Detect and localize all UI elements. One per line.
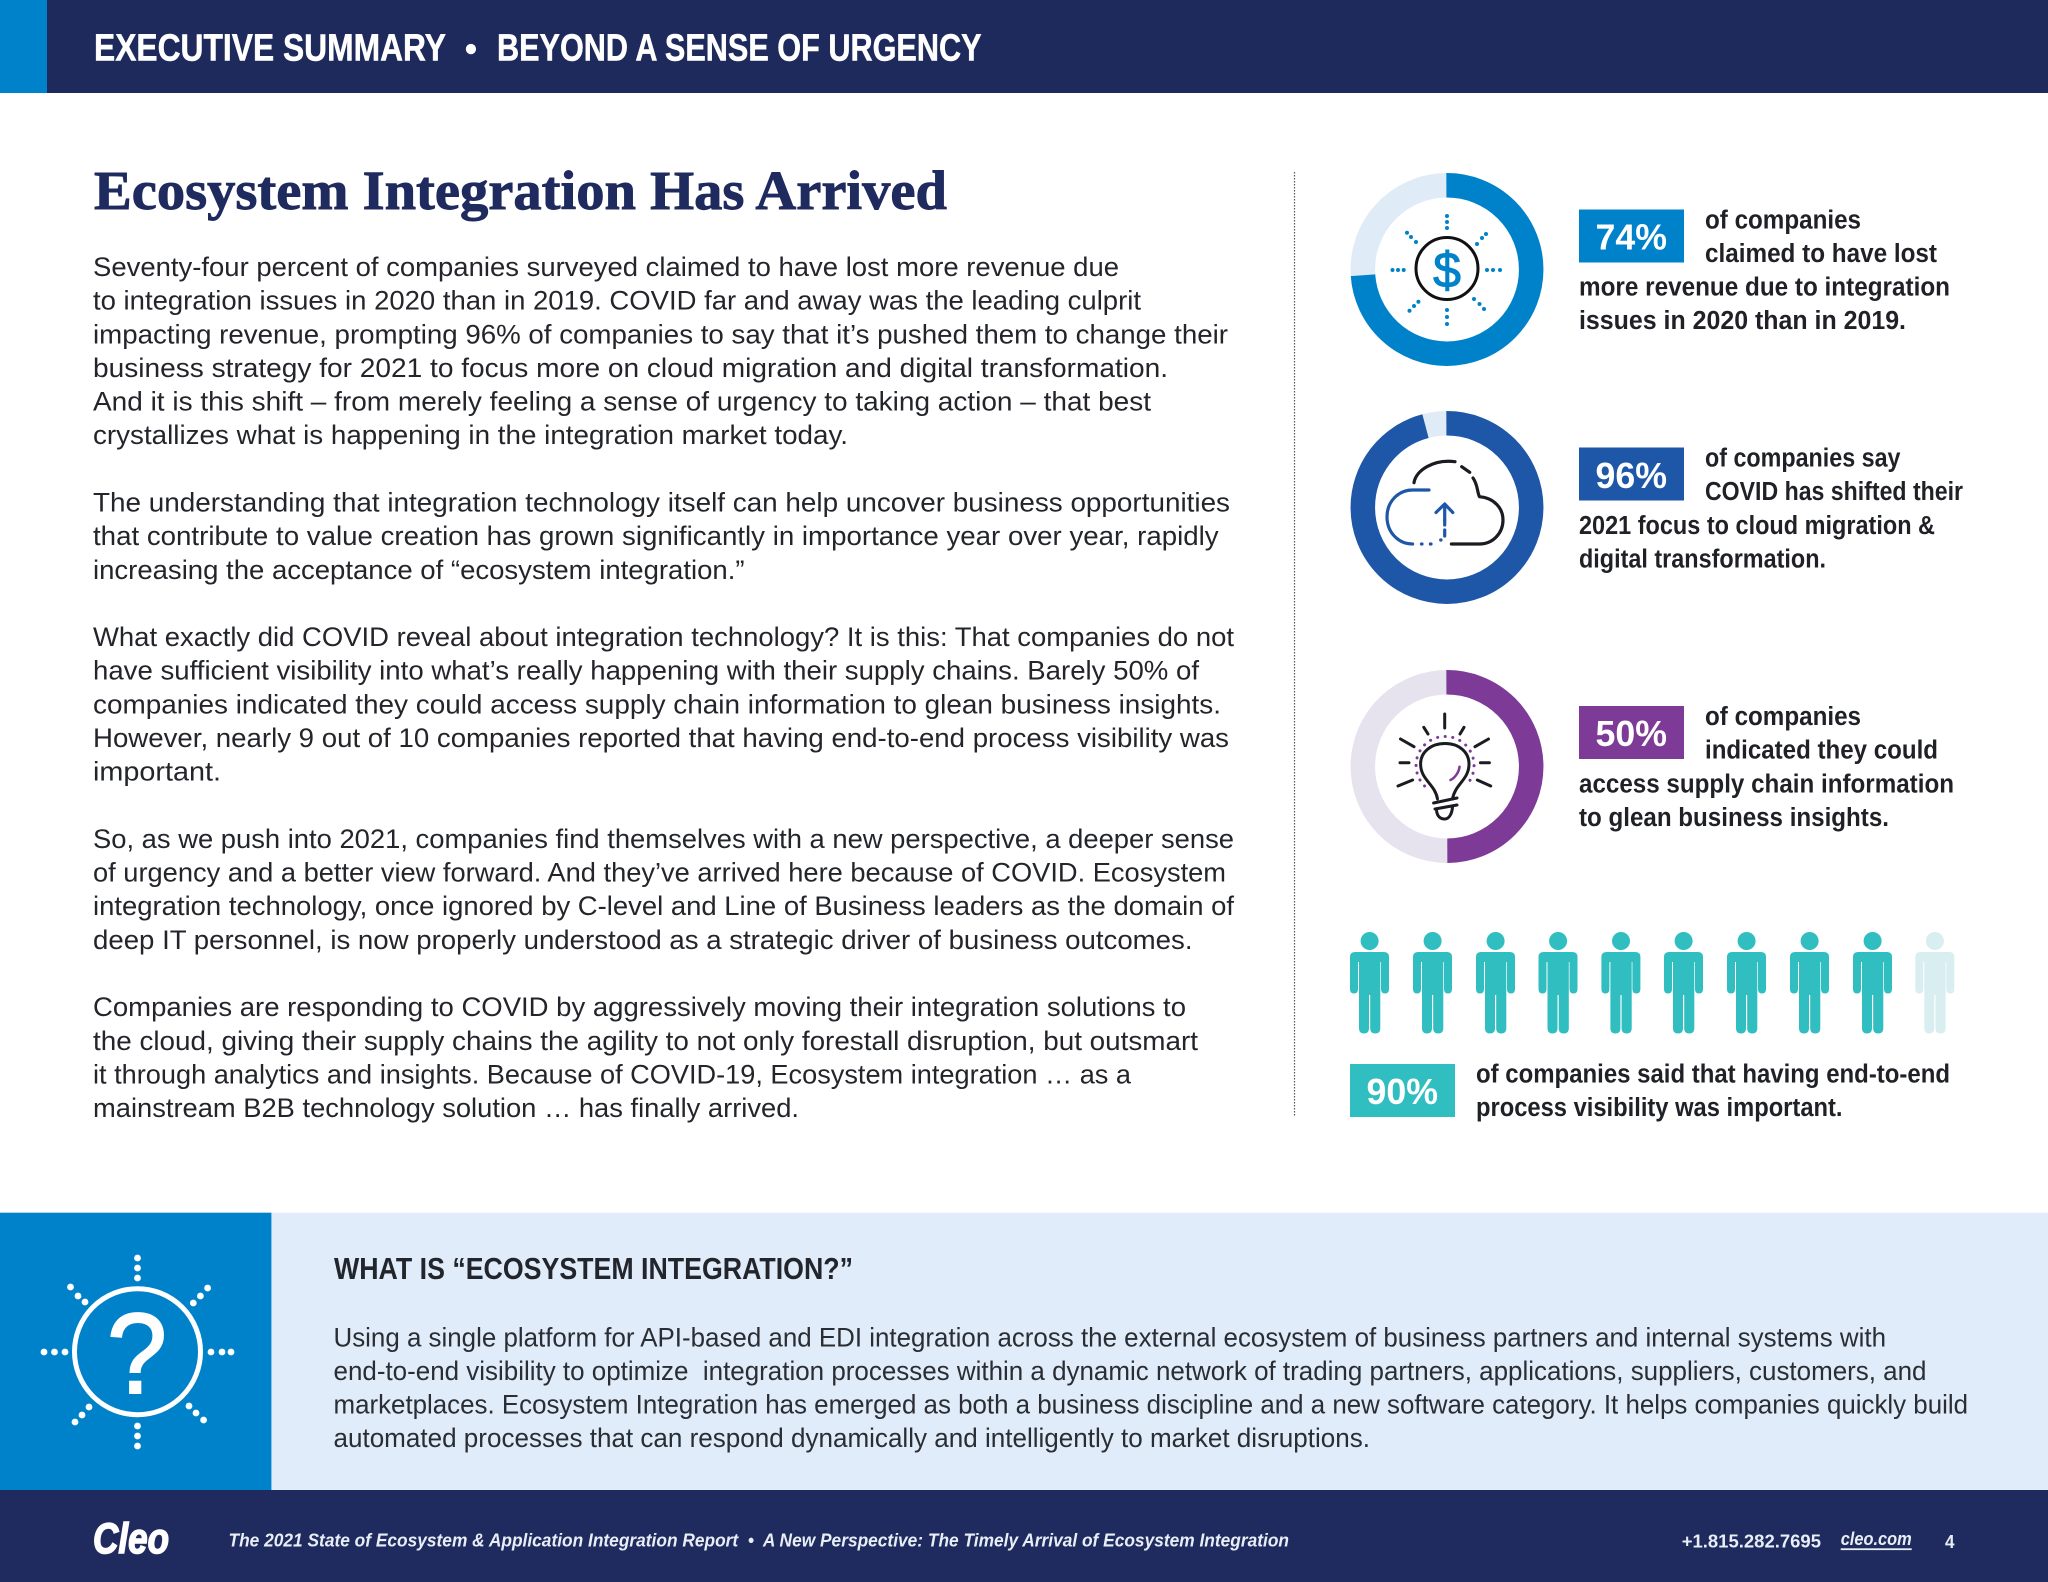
stat text 74%: [1579, 206, 1950, 335]
badge 90%: [1350, 1064, 1455, 1117]
pictogram: nine of ten people: [1350, 932, 1954, 1034]
paragraph 5: mainstream B2B technology solution … has finally arrived.: [93, 1093, 799, 1123]
icon: dollar sign with rays: [1390, 214, 1502, 326]
paragraph 3: important.: [93, 757, 221, 787]
stat: 50% supply chain insight: [1363, 682, 1954, 851]
paragraph 3: However, nearly 9 out of 10 companies reported that having end-to-end process visibility was: [93, 723, 1229, 753]
paragraph 5: [93, 992, 1199, 1123]
donut chart 96%: [1363, 423, 1531, 592]
panel definition text: marketplaces. Ecosystem Integration has emerged as both a business discipline and a new software category. It helps companies quickly build: [334, 1390, 1968, 1420]
stat text 50%: [1579, 703, 1954, 832]
icon: question mark with rays: [41, 1255, 234, 1449]
paragraph 1: business strategy for 2021 to focus more on cloud migration and digital transformation.: [93, 353, 1168, 383]
panel definition text: [334, 1323, 1968, 1453]
stat: 96% cloud shift: [1363, 423, 1963, 592]
paragraph 5: the cloud, giving their supply chains the agility to not only forestall disruption, but outsmart: [93, 1026, 1199, 1056]
paragraph 3: companies indicated they could access supply chain information to glean business insights.: [93, 689, 1221, 719]
paragraph 4: integration technology, once ignored by C-level and Line of Business leaders as the domain of: [93, 891, 1235, 921]
stat text 96%: [1579, 445, 1963, 574]
panel definition text: automated processes that can respond dynamically and intelligently to market disruptions.: [334, 1423, 1370, 1453]
badge 96%: 96%: [1596, 455, 1667, 496]
badge 50%: 50%: [1596, 713, 1667, 754]
paragraph 1: crystallizes what is happening in the integration market today.: [93, 420, 848, 450]
icon: light bulb: [1398, 714, 1491, 819]
header title: BEYOND A SENSE OF URGENCY: [497, 28, 982, 70]
stat text 50%: access supply chain information: [1579, 770, 1954, 798]
stat text 74%: more revenue due to integration: [1579, 274, 1950, 302]
stat text 96%: digital transformation.: [1579, 546, 1826, 574]
paragraph 1: And it is this shift – from merely feeling a sense of urgency to taking action – that best: [93, 387, 1152, 417]
stat text 74%: of companies: [1705, 206, 1861, 234]
paragraph 3: What exactly did COVID reveal about integration technology? It is this: That companies do not: [93, 622, 1235, 652]
stat text 90%: process visibility was important.: [1476, 1094, 1842, 1122]
header title: EXECUTIVE SUMMARY: [94, 28, 446, 70]
page number: 4: [1945, 1531, 1955, 1552]
panel definition text: Using a single platform for API-based and EDI integration across the external ecosystem of business partners and internal systems with: [334, 1323, 1886, 1353]
footer bar: [0, 1490, 2048, 1582]
paragraph 1: impacting revenue, prompting 96% of companies to say that it’s pushed them to change their: [93, 319, 1228, 349]
footer phone: +1.815.282.7695: [1682, 1531, 1821, 1552]
panel definition text: end-to-end visibility to optimize integration processes within a dynamic network of trading partners, applications, suppliers, customers, and: [334, 1356, 1926, 1386]
header bar: [0, 0, 2048, 93]
paragraph 4: of urgency and a better view forward. And they’ve arrived here because of COVID. Ecosystem: [93, 858, 1226, 888]
badge 74%: [1579, 210, 1684, 262]
icon: dollar sign with rays: $: [1433, 242, 1461, 298]
paragraph 2: The understanding that integration technology itself can help uncover business opportunities: [93, 488, 1230, 518]
icon: question mark with rays: ?: [107, 1291, 167, 1418]
badge 50%: [1579, 706, 1684, 759]
header title: •: [465, 30, 477, 68]
icon: cloud upload: [1387, 461, 1503, 544]
panel heading: WHAT IS “ECOSYSTEM INTEGRATION?”: [334, 1251, 853, 1286]
paragraph 1: [93, 252, 1228, 450]
paragraph 5: Companies are responding to COVID by aggressively moving their integration solutions to: [93, 992, 1186, 1022]
paragraph 4: So, as we push into 2021, companies find themselves with a new perspective, a deeper sense: [93, 824, 1234, 854]
stat text 50%: indicated they could: [1705, 737, 1938, 765]
footer website: cleo.com: [1841, 1528, 1912, 1549]
paragraph 2: that contribute to value creation has grown significantly in importance year over year, rapidly: [93, 521, 1219, 551]
logo: Cleo: Cleo: [93, 1515, 169, 1563]
main heading: Ecosystem Integration Has Arrived: [94, 160, 947, 221]
paragraph 2: [93, 488, 1230, 585]
paragraph 3: have sufficient visibility into what’s really happening with their supply chains. Barely 50% of: [93, 656, 1199, 686]
badge 90%: 90%: [1366, 1071, 1438, 1112]
stat text 50%: of companies: [1705, 703, 1861, 731]
panel: what is ecosystem integration: [0, 1213, 2048, 1490]
stat text 50%: to glean business insights.: [1579, 804, 1889, 832]
stat text 96%: 2021 focus to cloud migration &: [1579, 512, 1935, 540]
paragraph 4: [93, 824, 1235, 955]
stat: 74% revenue loss: [1363, 185, 1950, 354]
paragraph 3: [93, 622, 1235, 787]
footer report title: The 2021 State of Ecosystem & Application Integration Report • A New Perspective: The Timely Arrival of Ecosystem Integration: [228, 1530, 1289, 1551]
paragraph 5: it through analytics and insights. Because of COVID-19, Ecosystem integration … as a: [93, 1059, 1132, 1089]
stat text 90%: of companies said that having end-to-end: [1476, 1061, 1950, 1089]
stat text 90%: [1476, 1061, 1950, 1122]
header title: [94, 28, 982, 70]
body text: [93, 252, 1235, 1123]
paragraph 1: to integration issues in 2020 than in 2019. COVID far and away was the leading culprit: [93, 286, 1141, 316]
stat text 96%: of companies say: [1705, 445, 1901, 473]
donut chart 50%: [1363, 682, 1531, 851]
stat: 90% process visibility: [1350, 932, 1954, 1122]
paragraph 2: increasing the acceptance of “ecosystem integration.”: [93, 555, 744, 585]
badge 96%: [1579, 448, 1684, 500]
paragraph 4: deep IT personnel, is now properly understood as a strategic driver of business outcomes.: [93, 925, 1192, 955]
badge 74%: 74%: [1596, 216, 1667, 257]
stat text 74%: claimed to have lost: [1705, 240, 1937, 268]
paragraph 1: Seventy-four percent of companies surveyed claimed to have lost more revenue due: [93, 252, 1119, 282]
stat text 96%: COVID has shifted their: [1705, 478, 1963, 506]
donut chart 74%: [1363, 185, 1531, 354]
stat text 74%: issues in 2020 than in 2019.: [1579, 307, 1906, 335]
